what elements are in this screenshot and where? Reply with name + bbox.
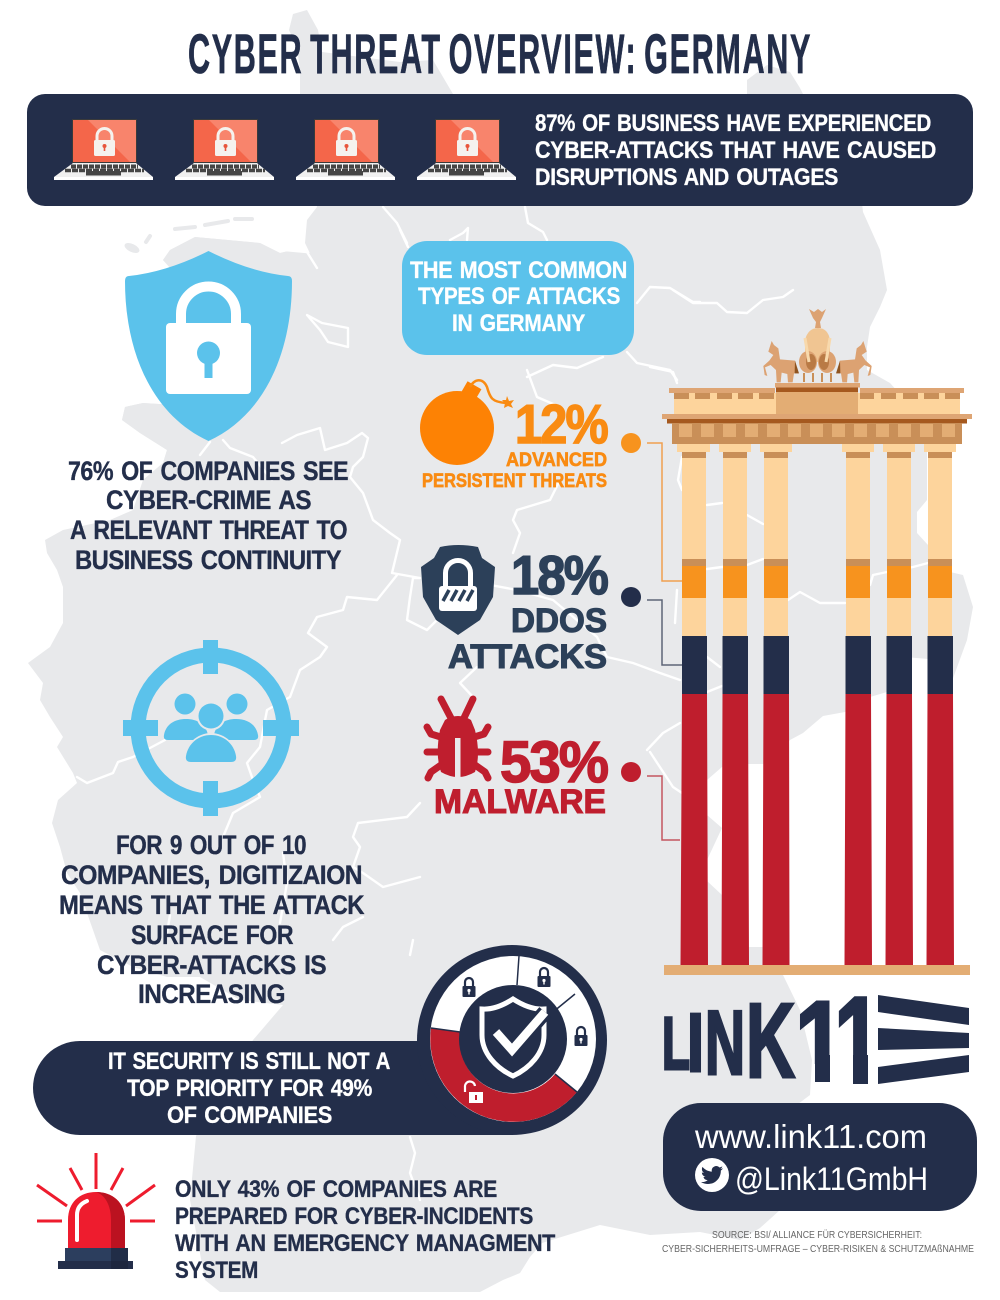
heading bubble: most common attacks — [402, 241, 634, 355]
heading bubble: most common attacks: THE MOST COMMON — [410, 257, 627, 284]
connector: red — [621, 762, 680, 840]
banner text: IT SECURITY IS STILL NOT A — [108, 1048, 390, 1075]
banner text: TOP PRIORITY FOR 49% — [127, 1075, 372, 1102]
text: 76% of companies: A RELEVANT THREAT TO — [70, 515, 347, 545]
banner text: OF COMPANIES — [167, 1102, 332, 1129]
stat: 12% advanced persistent threats: PERSISTENT THREATS — [422, 470, 607, 492]
text: 76% of companies: BUSINESS CONTINUITY — [75, 545, 342, 575]
icon: check shield — [482, 999, 545, 1076]
logo: Link11: N — [705, 993, 745, 1094]
icon: twitter — [695, 1158, 729, 1192]
connector: navy — [621, 587, 682, 665]
stat: 12% advanced persistent threats — [422, 393, 608, 492]
dial ring — [430, 956, 596, 1122]
icon: padlocks — [462, 968, 588, 1103]
text: only 43% prepared: WITH AN EMERGENCY MANAGMENT — [175, 1230, 556, 1257]
banner text: CYBER-ATTACKS THAT HAVE CAUSED — [535, 137, 936, 164]
text: only 43% prepared: ONLY 43% OF COMPANIES ARE — [175, 1176, 497, 1203]
logo: Link11: L — [662, 1002, 690, 1085]
connector: orange — [621, 433, 682, 581]
icon: dark shield with lock — [421, 545, 495, 635]
banner text: 87% OF BUSINESS HAVE EXPERIENCED — [535, 110, 931, 137]
banner text: DISRUPTIONS AND OUTAGES — [535, 164, 838, 191]
text: 9 out of 10 companies — [59, 830, 364, 1009]
logo: Link11: I — [687, 996, 704, 1089]
heading bubble: most common attacks: IN GERMANY — [452, 310, 585, 337]
banner text — [108, 1048, 390, 1129]
icon: blue shield with padlock — [125, 251, 292, 441]
stat: 53% malware — [434, 730, 608, 821]
text: 9 out of 10 companies: SURFACE FOR — [131, 920, 293, 950]
text: 9 out of 10 companies: MEANS THAT THE ATTACK — [59, 890, 364, 920]
logo: Link11: 1 — [834, 972, 882, 1111]
text: 76% of companies: CYBER-CRIME AS — [106, 485, 311, 515]
text: only 43% prepared — [175, 1176, 556, 1284]
logo: Link11: 1 — [795, 977, 845, 1107]
stat: 53% malware: 53% — [500, 730, 608, 795]
icon: locked laptops — [54, 119, 516, 180]
stat: 18% ddos attacks — [448, 544, 608, 676]
text: 9 out of 10 companies: COMPANIES, DIGITIZAION — [61, 860, 362, 890]
text: only 43% prepared: PREPARED FOR CYBER-INCIDENTS — [175, 1203, 533, 1230]
entablature — [662, 383, 972, 444]
text: 76% of companies: 76% OF COMPANIES SEE — [68, 456, 348, 486]
panel: top banner — [27, 94, 973, 206]
stat: 18% ddos attacks: DDOS — [511, 602, 607, 640]
quadriga — [763, 309, 872, 382]
stat: 12% advanced persistent threats: 12% — [515, 393, 608, 455]
panel: website and twitter: @Link11GmbH — [735, 1161, 928, 1197]
icon: siren — [37, 1153, 155, 1269]
heading bubble: most common attacks: TYPES OF ATTACKS — [418, 283, 620, 310]
source note: SOURCE: BSI/ ALLIANCE FÜR CYBERSICHERHEIT: — [712, 1229, 922, 1241]
banner text — [535, 110, 936, 191]
capitals — [677, 444, 956, 458]
base — [664, 965, 970, 975]
logo: Link11: K — [746, 982, 795, 1100]
Brandenburg Gate bar chart — [662, 309, 972, 975]
text: 9 out of 10 companies: FOR 9 OUT OF 10 — [116, 830, 306, 860]
text: 9 out of 10 companies: CYBER-ATTACKS IS — [97, 950, 326, 980]
panel: website and twitter — [663, 1103, 977, 1211]
stat: 18% ddos attacks: 18% — [511, 544, 608, 606]
panel: IT security banner — [33, 945, 607, 1135]
text: only 43% prepared: SYSTEM — [175, 1257, 258, 1284]
icon: malware bug — [427, 699, 488, 778]
stat: 12% advanced persistent threats: ADVANCED — [506, 449, 607, 471]
source note — [662, 1229, 974, 1255]
text: 76% of companies — [68, 456, 348, 575]
text: 9 out of 10 companies: INCREASING — [138, 979, 285, 1009]
logo: Link11 — [664, 995, 969, 1084]
icon: target on people — [123, 640, 299, 816]
column shafts — [680, 458, 954, 965]
panel: website and twitter: www.link11.com — [694, 1118, 927, 1155]
icon: bomb — [420, 380, 514, 465]
stat: 53% malware: MALWARE — [434, 783, 606, 821]
stat: 18% ddos attacks: ATTACKS — [448, 638, 607, 676]
